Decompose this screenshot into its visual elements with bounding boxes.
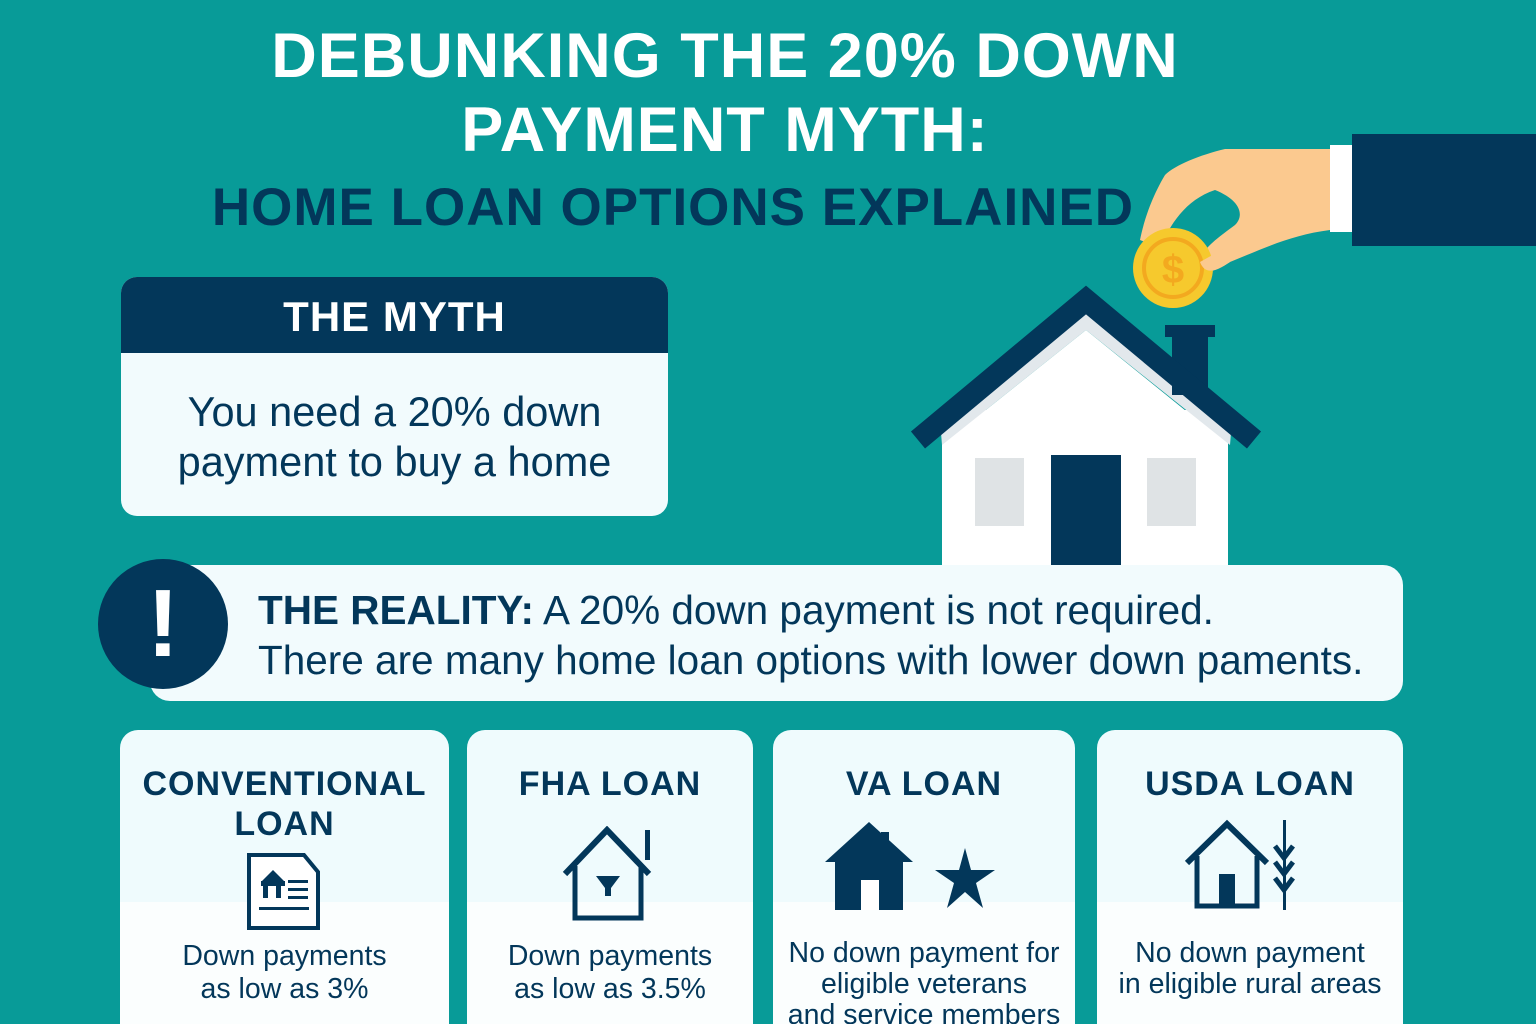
reality text: There are many home loan options with lower down paments. <box>258 637 1363 683</box>
card: va loan: No down payment for <box>789 937 1059 969</box>
card: usda loan <box>1097 730 1403 1024</box>
reality text <box>258 587 1363 683</box>
myth text <box>178 388 611 485</box>
myth text: payment to buy a home <box>178 438 611 485</box>
card: conventional loan <box>120 730 449 1024</box>
icon: document <box>247 853 320 930</box>
card: conventional loan: as low as 3% <box>201 973 368 1005</box>
hand and coin: $ <box>1162 248 1184 292</box>
card: va loan <box>773 730 1075 1024</box>
card: usda loan: in eligible rural areas <box>1118 968 1381 1000</box>
card: fha loan: as low as 3.5% <box>514 973 706 1005</box>
title: DEBUNKING THE 20% DOWN <box>271 21 1179 91</box>
title: HOME LOAN OPTIONS EXPLAINED <box>212 178 1134 237</box>
card: conventional loan: CONVENTIONAL <box>142 765 426 803</box>
panel: the reality <box>150 565 1403 701</box>
card: usda loan: USDA LOAN <box>1145 765 1355 803</box>
panel: the myth <box>121 277 668 516</box>
myth heading: THE MYTH <box>283 293 506 340</box>
icon: house <box>562 826 652 920</box>
card: usda loan: No down payment <box>1135 937 1365 969</box>
card: conventional loan: Down payments <box>182 940 387 972</box>
myth heading <box>121 277 668 353</box>
card: va loan: eligible veterans <box>821 968 1027 1000</box>
icon: house and star <box>825 822 995 910</box>
card: fha loan: FHA LOAN <box>519 765 701 803</box>
icon: exclamation circle <box>98 559 228 689</box>
myth text: You need a 20% down <box>188 388 601 435</box>
reality text: THE REALITY: A 20% down payment is not required. <box>258 587 1214 633</box>
card: fha loan: Down payments <box>508 940 712 972</box>
card: fha loan <box>467 730 753 1024</box>
card: va loan: VA LOAN <box>846 765 1002 803</box>
icon: exclamation circle: ! <box>147 570 179 677</box>
icon: house with wheat <box>1185 820 1295 910</box>
title <box>212 21 1179 237</box>
hand and coin <box>1133 134 1536 308</box>
card: conventional loan: LOAN <box>234 805 335 843</box>
house <box>918 300 1254 566</box>
title: PAYMENT MYTH: <box>461 95 989 165</box>
